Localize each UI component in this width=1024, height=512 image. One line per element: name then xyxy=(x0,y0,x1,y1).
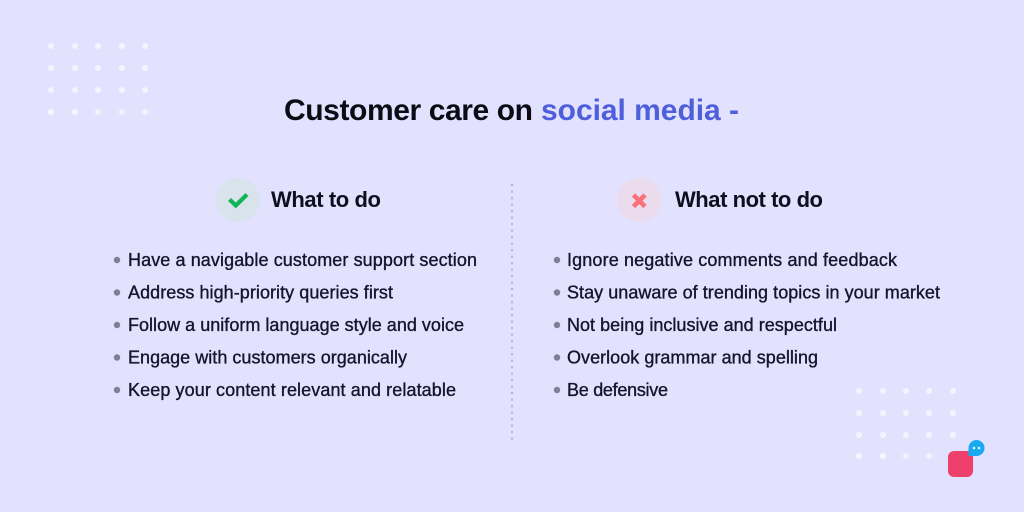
list: what to do items: Follow a uniform language style and voice xyxy=(128,315,464,335)
icon: logo with chat bubble xyxy=(948,440,984,477)
panel: what not to do xyxy=(554,178,940,400)
list: what not to do items xyxy=(554,250,940,400)
title xyxy=(284,94,739,127)
title: social media - xyxy=(541,94,739,127)
list: what to do items: Keep your content relevant and relatable xyxy=(128,380,456,400)
icon: red cross xyxy=(617,178,661,222)
dot grid: bottom right xyxy=(856,388,956,459)
list: what to do items: Have a navigable customer support section xyxy=(128,250,477,270)
list: what not to do items: Stay unaware of trending topics in your market xyxy=(567,282,940,302)
icon: green check xyxy=(216,178,260,222)
heading: what not to do: What not to do xyxy=(675,187,823,212)
list: what not to do items: Ignore negative comments and feedback xyxy=(567,250,898,270)
heading: what to do: What to do xyxy=(271,187,381,212)
list: what to do items xyxy=(114,250,477,400)
list: what to do items: Address high-priority queries first xyxy=(128,282,393,302)
list: what not to do items: Be defensive xyxy=(567,380,668,400)
list: what not to do items: Overlook grammar and spelling xyxy=(567,348,818,368)
title: Customer care on xyxy=(284,94,533,127)
panel: what to do xyxy=(114,178,477,400)
list: what not to do items: Not being inclusive and respectful xyxy=(567,315,837,335)
dot grid: top left xyxy=(48,43,148,115)
divider: dotted vertical line xyxy=(511,184,513,442)
list: what to do items: Engage with customers organically xyxy=(128,348,407,368)
